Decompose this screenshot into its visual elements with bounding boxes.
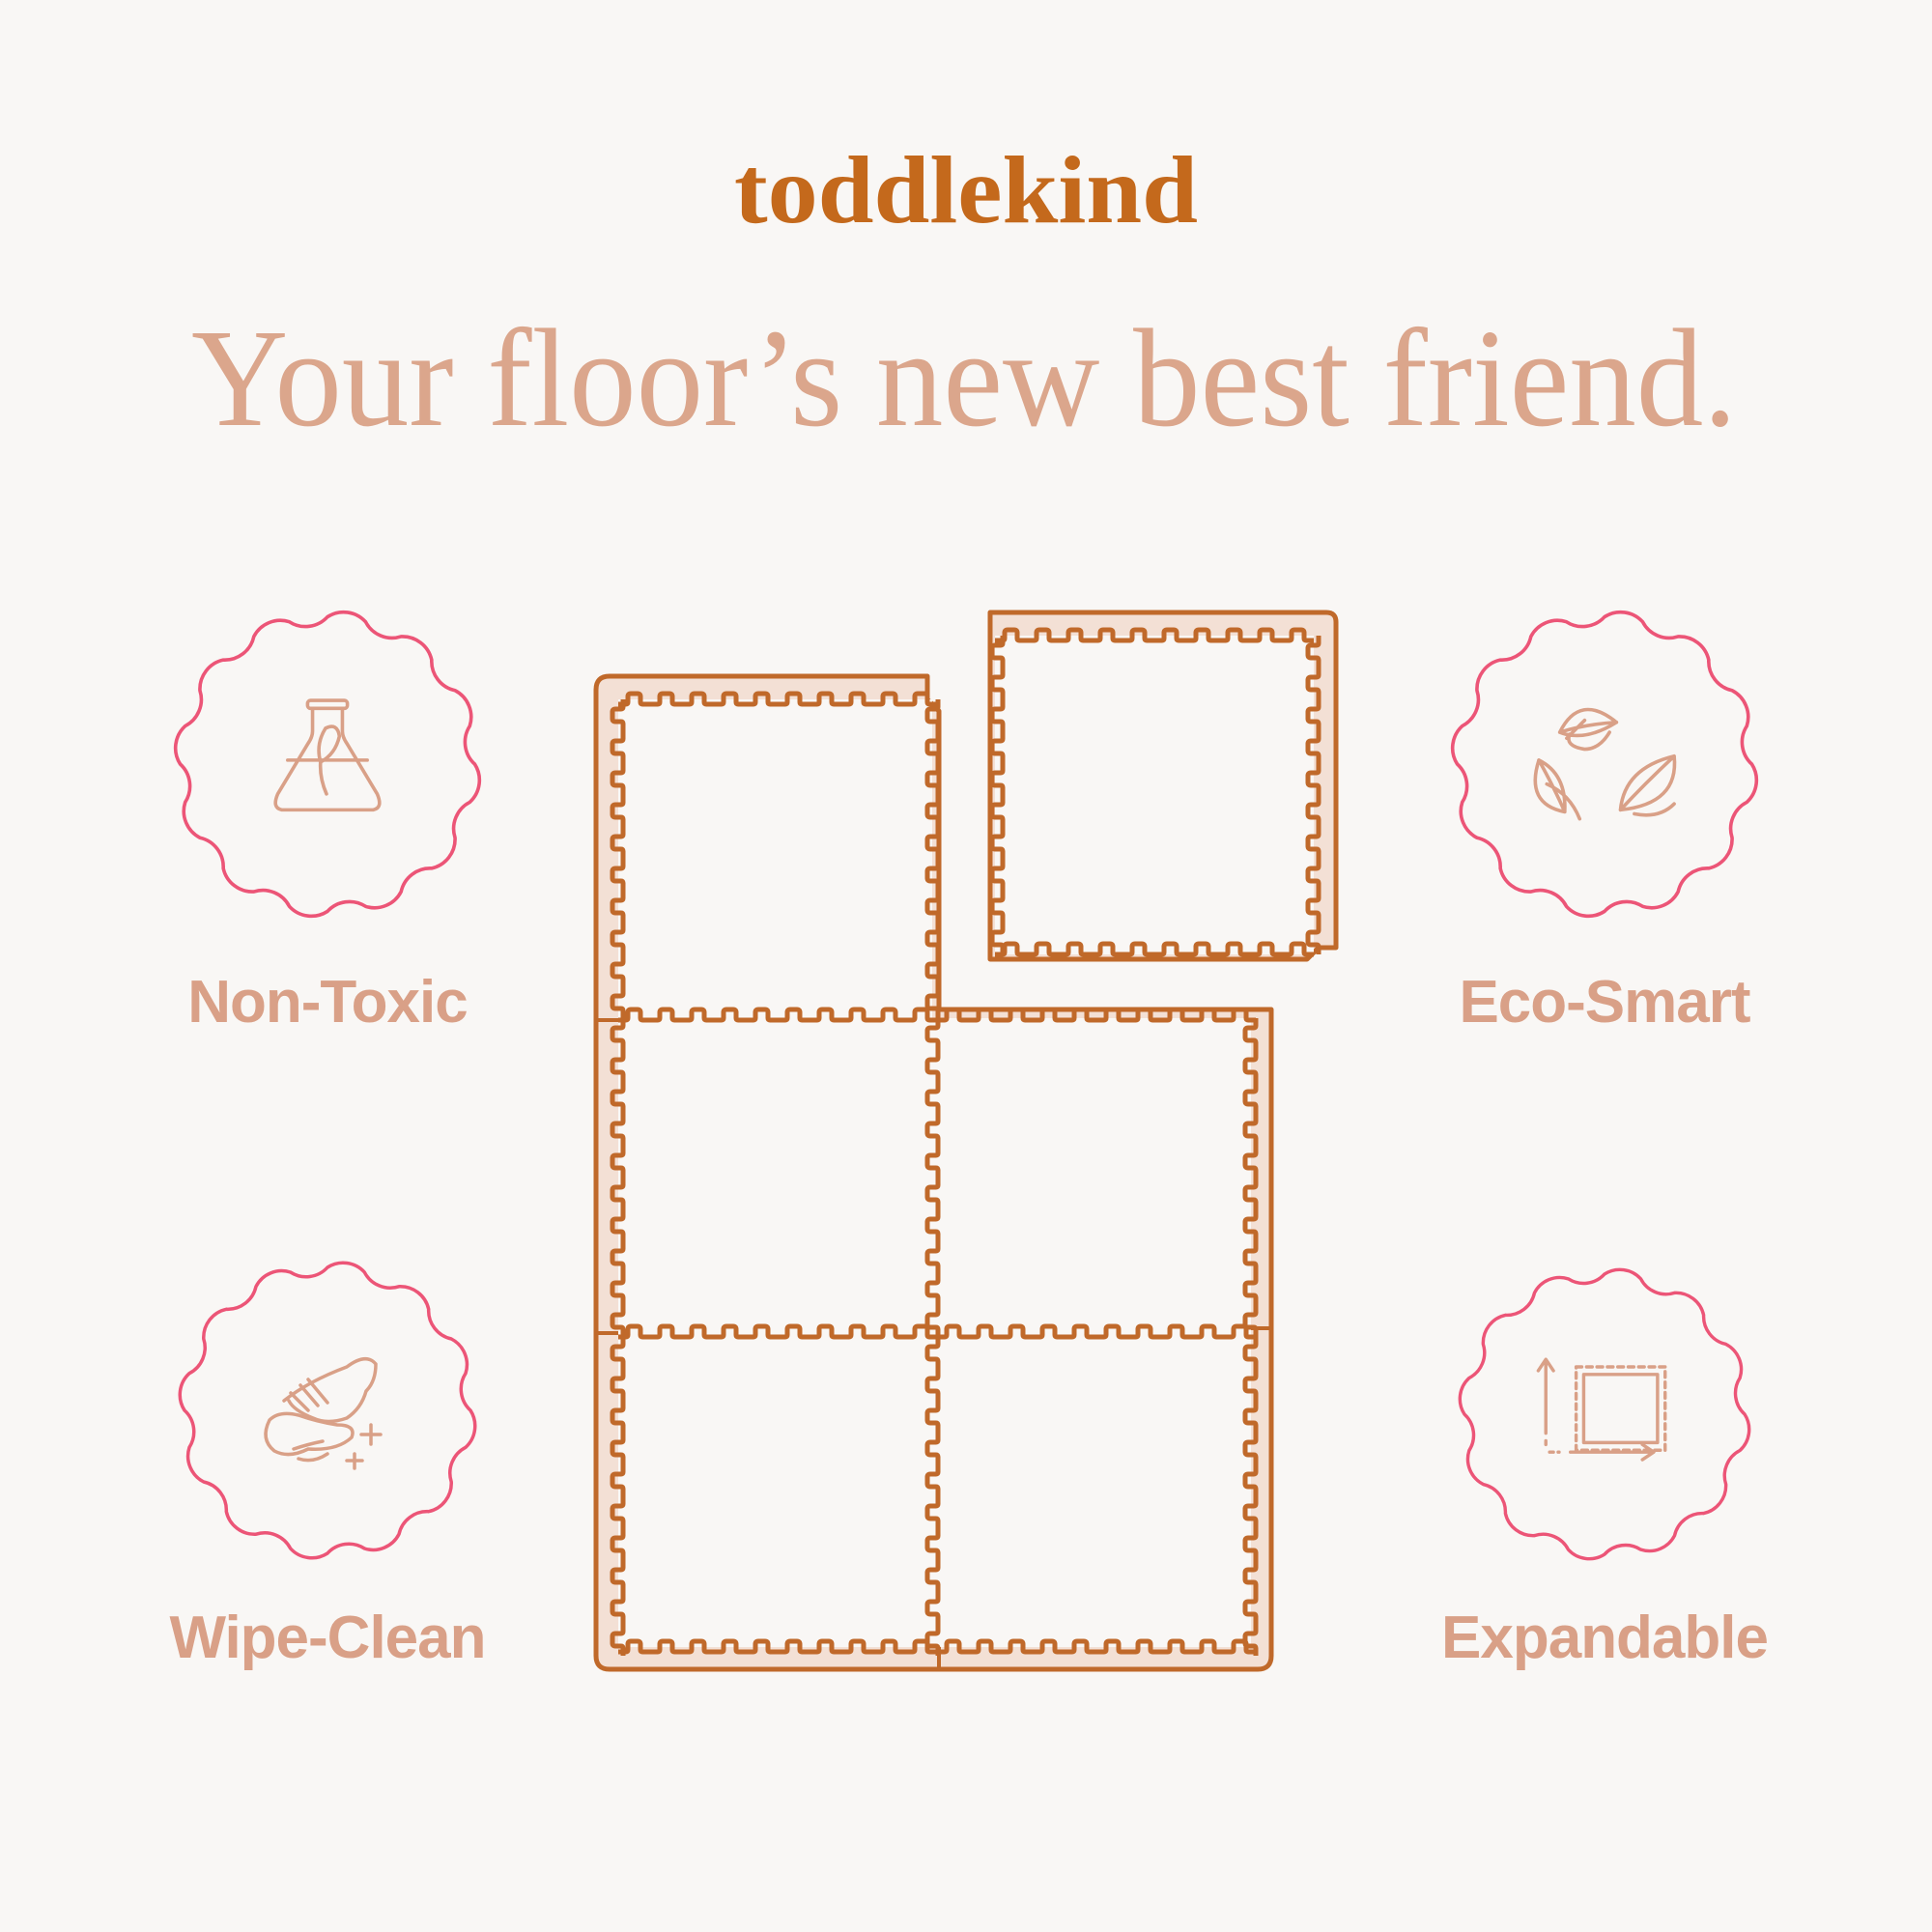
label: Wipe-Clean: Wipe-Clean xyxy=(169,1605,486,1671)
icon: flask xyxy=(275,700,380,810)
label: Non-Toxic: Non-Toxic xyxy=(187,969,468,1036)
icon: expanding tile xyxy=(1538,1359,1665,1460)
label: Eco-Smart: Eco-Smart xyxy=(1459,969,1750,1036)
logo: toddlekind xyxy=(734,136,1198,243)
badge: Wipe-Clean xyxy=(180,1263,475,1558)
badge: Expandable xyxy=(1460,1269,1749,1559)
icon: hand wiping xyxy=(266,1359,381,1468)
floating puzzle tile xyxy=(987,612,1336,960)
badge: Eco-Smart xyxy=(1453,612,1756,916)
badge: Non-Toxic xyxy=(176,612,479,916)
icon: recycling leaves xyxy=(1535,709,1675,819)
puzzle mat xyxy=(596,676,1271,1669)
title: Your floor’s new best friend. xyxy=(191,301,1737,456)
label: Expandable: Expandable xyxy=(1441,1605,1768,1671)
